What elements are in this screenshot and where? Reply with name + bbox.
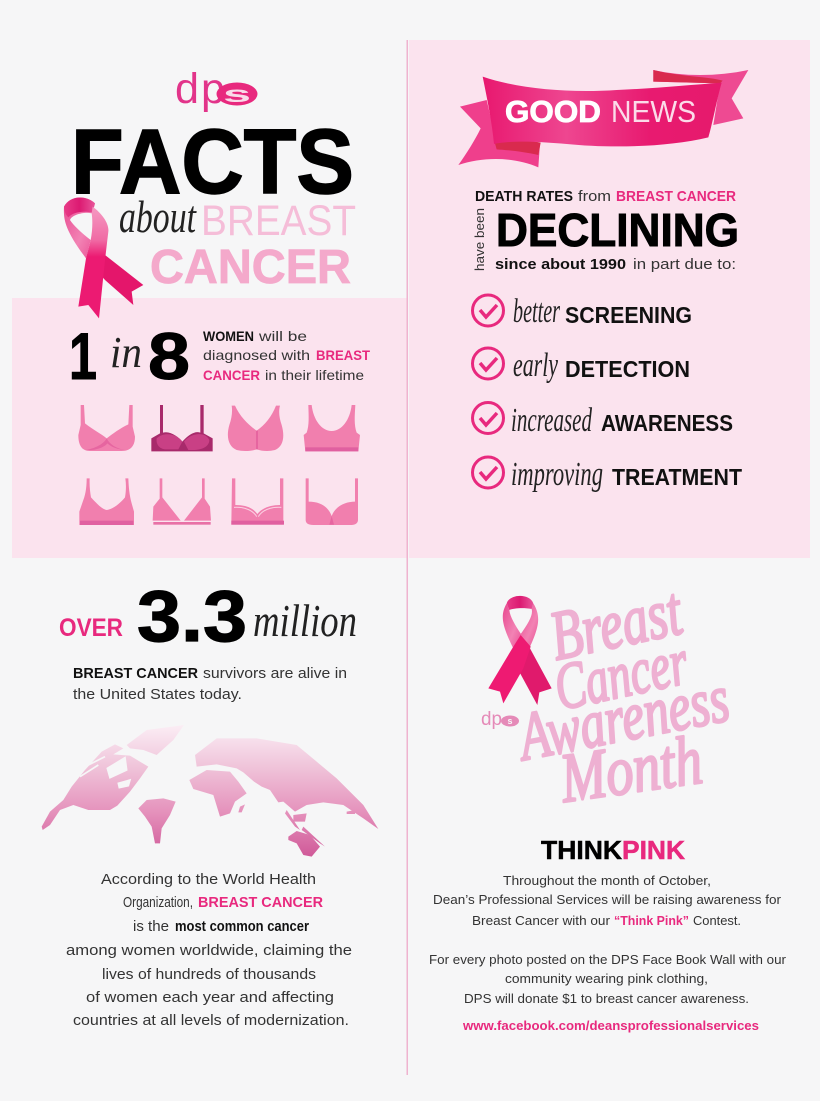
item: increased awareness: AWARENESS — [601, 410, 733, 436]
text: think pink contest details: For every photo posted on the DPS Face Book Wall with our — [429, 952, 787, 967]
panel: 1 in 8 statistic — [12, 298, 407, 558]
text: women diagnosed: in their lifetime — [265, 367, 364, 383]
item: better screening: better — [513, 293, 560, 330]
heading: death rates declining: BREAST CANCER — [616, 188, 736, 205]
text: women diagnosed: CANCER — [203, 367, 260, 383]
icons: eight bras — [78, 405, 360, 525]
map: greenland — [127, 725, 184, 755]
stat: 1 in 8 — [69, 319, 190, 393]
icon: upright pink ribbon — [488, 596, 552, 705]
map: eurasia — [195, 738, 378, 829]
stat: 1 in 8: in — [110, 328, 142, 377]
text: world health organization paragraph: According to the World Health — [101, 871, 316, 888]
item: early detection: early — [513, 347, 559, 384]
text: women diagnosed: BREAST — [316, 347, 370, 363]
item: early detection — [472, 347, 690, 384]
logo: dps small — [481, 709, 519, 730]
icon: bra 5 — [79, 478, 134, 525]
text: world health organization paragraph: BREAST CANCER — [198, 894, 323, 911]
lettering: breast cancer awareness month: Breast — [543, 573, 690, 676]
heading: death rates declining: from — [578, 188, 611, 205]
lettering: breast cancer awareness month: Cancer — [548, 625, 694, 725]
item: increased awareness: increased — [511, 402, 593, 439]
title: FACTS about BREAST CANCER — [71, 111, 356, 294]
text: world health organization paragraph: is the — [133, 918, 169, 935]
text: world health organization paragraph: most common cancer — [175, 918, 309, 935]
stat: over 3.3 million — [59, 577, 357, 657]
icon: bra 2 — [151, 405, 213, 451]
logo: dps small: s — [507, 716, 513, 726]
link: facebook url: www.facebook.com/deansprofessionalservices — [462, 1018, 759, 1033]
icon: bra 1 — [78, 405, 135, 451]
text: world health organization paragraph — [66, 871, 352, 1029]
icon: bra 8 — [306, 478, 358, 525]
text: think pink contest details: Breast Cancer with our — [472, 913, 611, 928]
text: survivors — [73, 665, 347, 703]
text: think pink contest details: “Think Pink” — [614, 913, 689, 928]
map: south america — [138, 798, 176, 843]
lettering: breast cancer awareness month: Month — [555, 722, 707, 818]
text: think pink contest details: community wearing pink clothing, — [505, 971, 708, 986]
item: improving treatment: improving — [511, 456, 603, 493]
text: survivors: survivors are alive in — [203, 665, 347, 682]
stat: over 3.3 million: OVER — [59, 614, 123, 642]
heading: death rates declining: have been — [472, 208, 487, 271]
title: FACTS about BREAST CANCER: about — [119, 192, 197, 242]
stat: over 3.3 million: million — [253, 595, 357, 646]
map: southeast asia islands — [238, 804, 355, 847]
heading: death rates declining: in part due to: — [633, 256, 736, 273]
logo: dps small: dp — [481, 709, 502, 730]
map: australia — [288, 831, 320, 857]
heading: death rates declining — [472, 188, 739, 273]
text: world health organization paragraph: among women worldwide, claiming the — [66, 942, 352, 959]
item: increased awareness — [472, 402, 733, 439]
text: think pink contest details: Contest. — [693, 913, 741, 928]
title: FACTS about BREAST CANCER: BREAST — [201, 197, 356, 245]
checklist: reasons for decline — [472, 293, 742, 493]
text: think pink contest details: Dean’s Professional Services will be raising awareness for — [433, 892, 782, 907]
item: better screening — [472, 293, 692, 330]
logo: dps top: p — [201, 65, 225, 113]
text: think pink contest details — [429, 873, 787, 1006]
panel: good news — [409, 40, 810, 558]
stat: 1 in 8: 1 — [69, 319, 97, 393]
icon: bra 3 — [228, 406, 283, 451]
logo: dps top: d — [175, 65, 199, 113]
text: women diagnosed: WOMEN — [203, 328, 254, 344]
item: improving treatment: TREATMENT — [612, 464, 742, 490]
text: survivors: the United States today. — [73, 686, 242, 703]
banner text: GOOD NEWS: NEWS — [611, 94, 696, 129]
heading: think pink: THINK — [541, 835, 622, 865]
center vertical divider — [406, 40, 408, 1075]
lettering: breast cancer awareness month — [509, 573, 735, 818]
text: think pink contest details: Throughout the month of October, — [503, 873, 711, 888]
heading: think pink: PINK — [622, 835, 685, 865]
text: think pink contest details: DPS will donate $1 to breast cancer awareness. — [464, 991, 749, 1006]
map: africa — [189, 770, 247, 817]
chart: world map — [42, 725, 378, 857]
text: women diagnosed: diagnosed with — [203, 347, 310, 363]
lettering: breast cancer awareness month: Awareness — [509, 660, 735, 775]
icon: bra 7 — [231, 478, 284, 525]
banner text: GOOD NEWS — [505, 94, 696, 129]
item: improving treatment — [472, 456, 742, 493]
heading: death rates declining: since about 1990 — [495, 256, 626, 273]
text: world health organization paragraph: lives of hundreds of thousands — [102, 966, 316, 983]
title: FACTS about BREAST CANCER: FACTS — [71, 111, 354, 213]
logo: dps top: s — [223, 81, 251, 107]
icon: tilted pink ribbon — [64, 197, 143, 318]
logo: dps top — [175, 65, 258, 113]
text: world health organization paragraph: countries at all levels of modernization. — [73, 1012, 349, 1029]
icon: bra 6 — [153, 478, 211, 525]
heading: think pink — [541, 835, 685, 865]
text: world health organization paragraph: Organization, — [123, 894, 193, 911]
stat: 1 in 8: 8 — [148, 319, 190, 393]
heading: death rates declining: DECLINING — [496, 204, 739, 256]
map: hudson bay and lakes — [80, 757, 130, 788]
item: early detection: DETECTION — [565, 356, 690, 382]
item: better screening: SCREENING — [565, 302, 692, 328]
banner: good news ribbon — [458, 70, 748, 167]
text: women diagnosed: will be — [258, 328, 307, 344]
icon: bra 4 — [304, 405, 360, 451]
text: survivors: BREAST CANCER — [73, 665, 198, 682]
text: world health organization paragraph: of women each year and affecting — [86, 989, 334, 1006]
map: north america — [42, 744, 148, 830]
banner text: GOOD NEWS: GOOD — [505, 94, 601, 129]
stat: over 3.3 million: 3.3 — [137, 577, 247, 657]
text: women diagnosed — [203, 328, 370, 383]
heading: death rates declining: DEATH RATES — [475, 188, 573, 205]
title: FACTS about BREAST CANCER: CANCER — [150, 241, 351, 294]
